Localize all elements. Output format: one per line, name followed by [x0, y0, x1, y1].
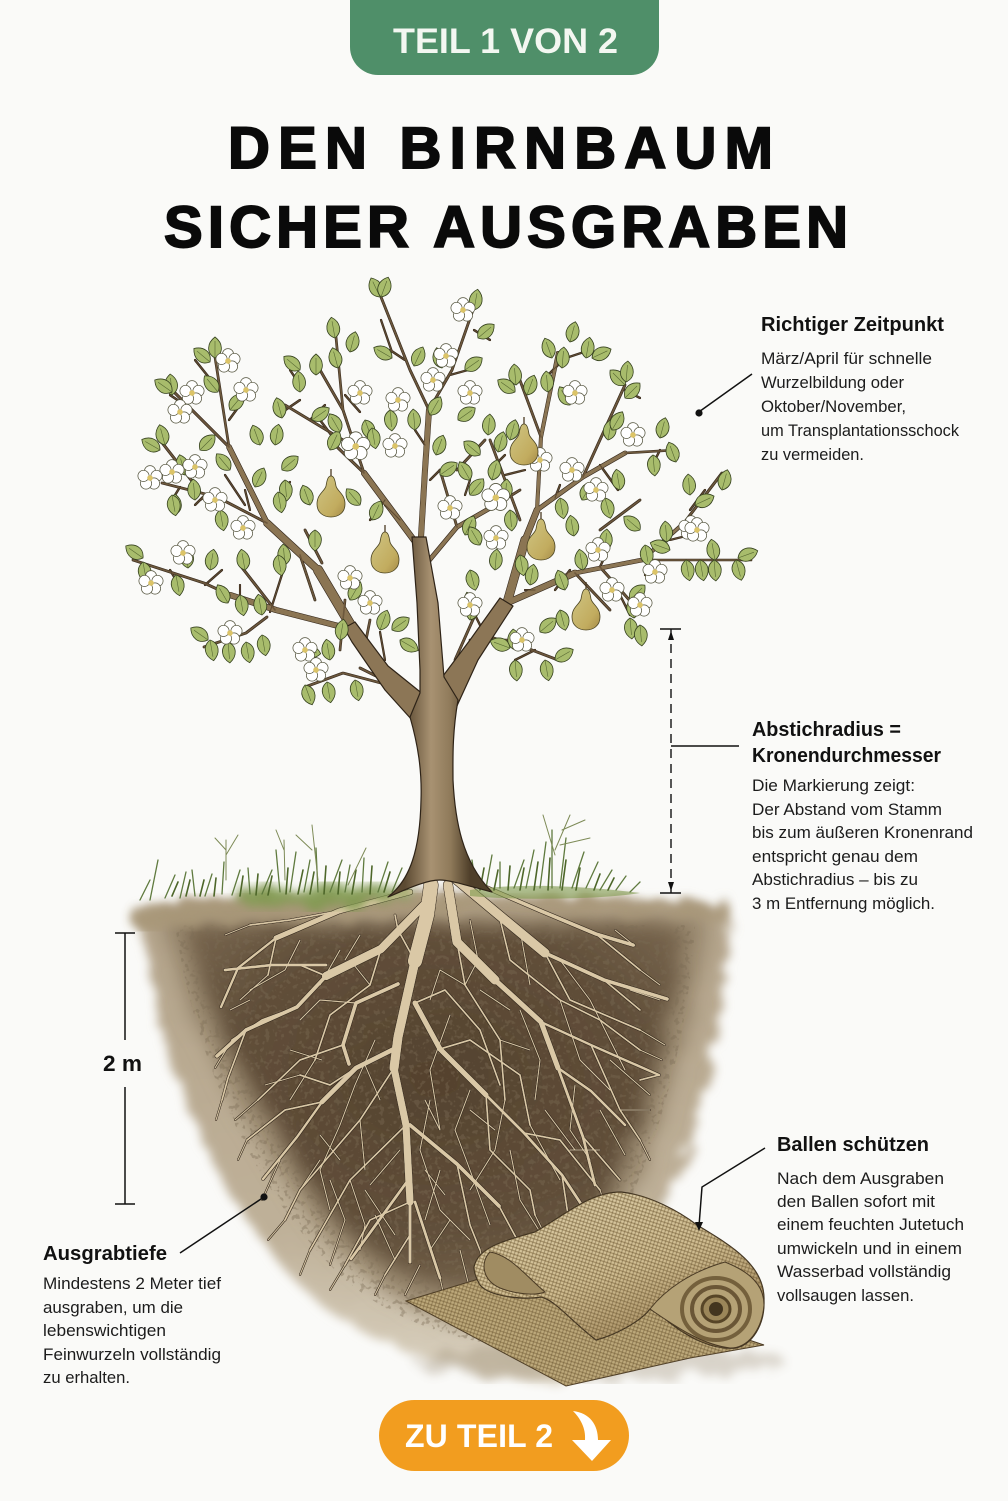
- tree: [122, 275, 760, 897]
- callout: Abstichradius: Abstichradius – bis zu: [752, 870, 918, 889]
- icon: curved arrow: [572, 1411, 611, 1461]
- callout: Ausgrabtiefe: Mindestens 2 Meter tief: [43, 1274, 221, 1293]
- measurement: 2 m depth: [103, 933, 142, 1204]
- roots: [215, 880, 667, 1300]
- grass and wild plants: [140, 815, 640, 909]
- tree trunk: [388, 537, 492, 897]
- title: DEN BIRNBAUM: [228, 116, 773, 181]
- callout: Abstichradius: Abstichradius =: [752, 718, 901, 741]
- callout: Ausgrabtiefe: lebenswichtigen: [43, 1321, 166, 1340]
- callout: Abstichradius: 3 m Entfernung möglich.: [752, 894, 935, 913]
- icon: jute cloth roll: [406, 1192, 785, 1386]
- callout: Ballen schützen: Nach dem Ausgraben: [777, 1169, 944, 1188]
- soil cross-section: [132, 894, 732, 1385]
- callout: Ausgrabtiefe: Ausgrabtiefe: [43, 1242, 167, 1265]
- title: SICHER AUSGRABEN: [164, 195, 848, 260]
- tree main limbs: [344, 598, 513, 720]
- callout: Abstichradius: Die Markierung zeigt:: [752, 776, 915, 795]
- measurement: 2 m depth: 2 m: [103, 1051, 142, 1076]
- title: [164, 116, 848, 260]
- callout: Ballen schützen: [695, 1133, 964, 1305]
- callout: Richtiger Zeitpunkt: um Transplantationsschock: [761, 421, 960, 440]
- callout: Richtiger Zeitpunkt: März/April für schnelle: [761, 349, 932, 368]
- callout: Richtiger Zeitpunkt: Oktober/November,: [761, 397, 906, 416]
- callout: Abstichradius: Kronendurchmesser: [752, 744, 941, 767]
- callout: Abstichradius: [660, 629, 973, 913]
- callout: Ballen schützen: Wasserbad vollständig: [777, 1262, 951, 1281]
- callout: Ballen schützen: einem feuchten Jutetuch: [777, 1215, 964, 1234]
- callout: Abstichradius: entspricht genau dem: [752, 847, 918, 866]
- callout: Ausgrabtiefe: Feinwurzeln vollständig: [43, 1345, 221, 1364]
- callout: Ballen schützen: Ballen schützen: [777, 1133, 929, 1156]
- callout: Ausgrabtiefe: ausgraben, um die: [43, 1298, 183, 1317]
- callout: Ballen schützen: umwickeln und in einem: [777, 1239, 962, 1258]
- tree pears: [317, 417, 600, 630]
- header badge: Teil 1 von 2: TEIL 1 VON 2: [393, 22, 618, 61]
- header badge: Teil 1 von 2: [350, 0, 659, 75]
- callout: Ausgrabtiefe: [43, 1193, 268, 1387]
- callout: Richtiger Zeitpunkt: Richtiger Zeitpunkt: [761, 313, 944, 336]
- button: zu Teil 2: ZU TEIL 2: [405, 1418, 553, 1454]
- callout: Ausgrabtiefe: zu erhalten.: [43, 1368, 130, 1387]
- callout: Abstichradius: bis zum äußeren Kronenrand: [752, 823, 973, 842]
- callout: Richtiger Zeitpunkt: [695, 313, 960, 464]
- callout: Ballen schützen: vollsaugen lassen.: [777, 1286, 914, 1305]
- tree branches: [133, 297, 751, 688]
- callout: Ballen schützen: den Ballen sofort mit: [777, 1192, 935, 1211]
- callout: Richtiger Zeitpunkt: Wurzelbildung oder: [761, 373, 904, 392]
- callout: Abstichradius: Der Abstand vom Stamm: [752, 800, 942, 819]
- callout: Richtiger Zeitpunkt: zu vermeiden.: [761, 445, 864, 464]
- button: zu Teil 2: [379, 1400, 629, 1471]
- tree leaves: [122, 275, 760, 707]
- tree blossoms: [138, 298, 709, 681]
